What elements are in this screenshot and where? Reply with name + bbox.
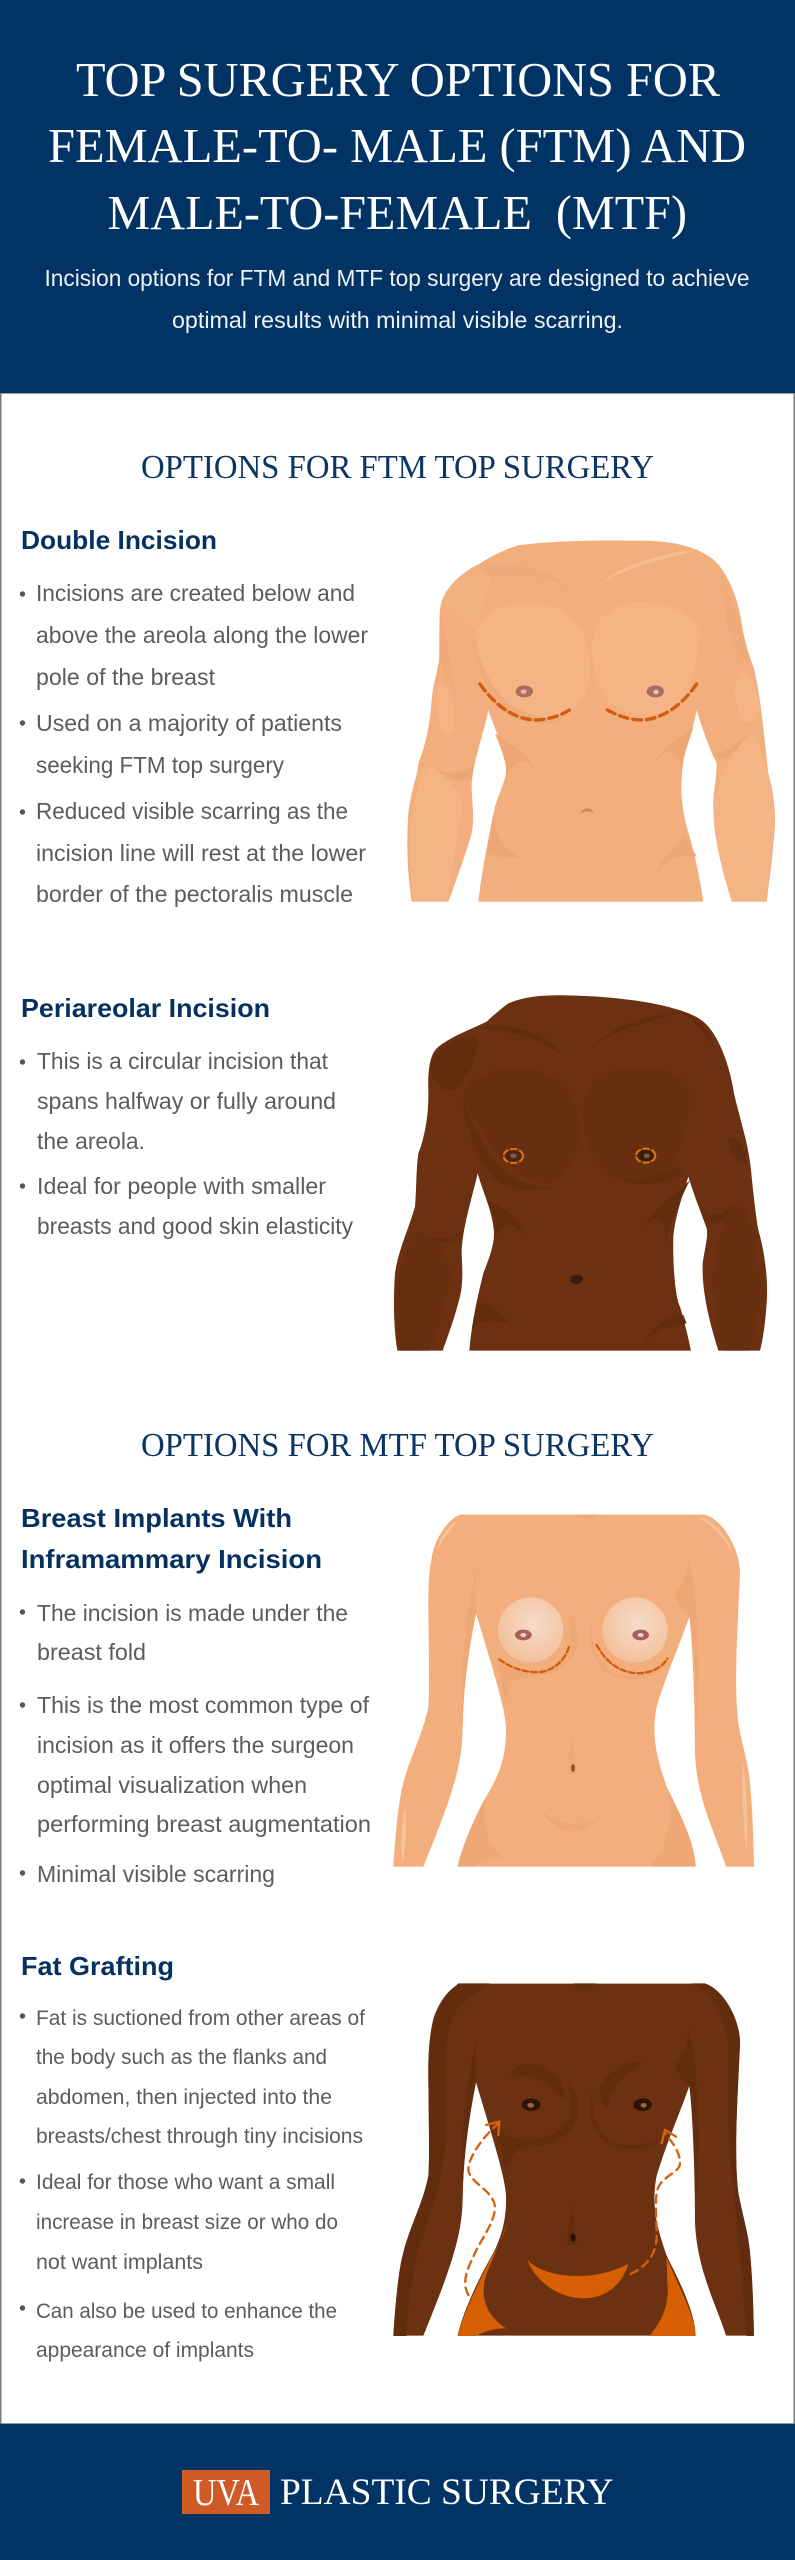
incision lines (499, 1645, 667, 1673)
title: TOP SURGERY OPTIONS FOR (76, 52, 720, 107)
subheading: Double Incision (21, 525, 217, 555)
arrow: right dashed path (631, 2130, 680, 2274)
nipples (522, 2098, 652, 2111)
subheading line 2: Inframammary Incision (21, 1544, 322, 1574)
illustration: fat grafting torso (393, 1983, 754, 2336)
bullet list: The incision is made under the (37, 1600, 348, 1626)
nipples (516, 685, 664, 697)
bullet list: the body such as the flanks and (36, 2045, 327, 2069)
navel (570, 1275, 583, 1284)
bullet list: Fat is suctioned from other areas of (36, 2006, 365, 2030)
bullet list: This is the most common type of (37, 1692, 370, 1718)
bullet list: the areola. (37, 1128, 145, 1154)
bullet list: incision line will rest at the lower (36, 840, 366, 866)
title: MALE-TO-FEMALE (MTF) (108, 185, 687, 240)
implants (498, 1597, 668, 1663)
footer panel (0, 2424, 795, 2560)
block: fat grafting text (20, 1951, 365, 2362)
logo: UVA (193, 2472, 259, 2514)
title: FEMALE-TO- MALE (FTM) AND (48, 118, 746, 173)
bullet list: pole of the breast (36, 664, 216, 690)
body shading (393, 1983, 754, 2336)
title (48, 52, 746, 240)
incision lines (480, 684, 697, 720)
bullet list: breasts and good skin elasticity (37, 1213, 353, 1239)
arrow: left dashed path (465, 2122, 499, 2295)
bullet list: Ideal for people with smaller (37, 1173, 326, 1199)
bullet list: above the areola along the lower (36, 622, 368, 648)
illustration: breast implants torso (393, 1515, 754, 1867)
bullet list: breast fold (37, 1639, 146, 1665)
bullet list: abdomen, then injected into the (36, 2085, 332, 2109)
subtitle: optimal results with minimal visible scarring. (172, 307, 623, 333)
logo: PLASTIC SURGERY (280, 2472, 614, 2513)
bullet list: breasts/chest through tiny incisions (36, 2124, 363, 2148)
navel (571, 1764, 575, 1772)
block: breast implants text (20, 1503, 371, 1887)
bullet list: appearance of implants (36, 2338, 254, 2362)
subheading: Breast Implants With (21, 1503, 292, 1533)
bullet list: border of the pectoralis muscle (36, 881, 353, 907)
navel (581, 808, 594, 813)
illustration: periareolar torso (394, 995, 767, 1351)
bullet list (20, 1600, 371, 1887)
bullet list: This is a circular incision that (37, 1048, 329, 1074)
bullet list (20, 2006, 365, 2362)
bullet list: incision as it offers the surgeon (37, 1732, 354, 1758)
block: double incision text (20, 525, 368, 907)
subheading: Fat Grafting (21, 1951, 174, 1981)
header panel (0, 0, 795, 393)
bullet list: Can also be used to enhance the (36, 2299, 337, 2323)
fat areas (458, 2224, 696, 2336)
subheading: Periareolar Incision (21, 993, 270, 1023)
bullet list (20, 1048, 353, 1239)
block: periareolar text (20, 993, 353, 1239)
bullet list: not want implants (36, 2250, 203, 2274)
muscle shading (397, 1066, 760, 1351)
bullet list: performing breast augmentation (37, 1811, 371, 1837)
bullet list: Reduced visible scarring as the (36, 798, 348, 824)
bullet list: Ideal for those who want a small (36, 2170, 335, 2194)
bullet list: spans halfway or fully around (37, 1088, 336, 1114)
heading: FTM options: OPTIONS FOR FTM TOP SURGERY (141, 449, 654, 486)
navel (571, 2233, 575, 2242)
bullet list: Incisions are created below and (36, 580, 355, 606)
areolas with periareolar incision (504, 1149, 655, 1163)
nipples (515, 1630, 649, 1640)
bullet list: seeking FTM top surgery (36, 752, 284, 778)
bullet list: Used on a majority of patients (36, 710, 342, 736)
subtitle: Incision options for FTM and MTF top surgery are designed to achieve (44, 265, 750, 291)
body panel (1, 393, 794, 2424)
subtitle (44, 265, 750, 333)
heading: MTF options: OPTIONS FOR MTF TOP SURGERY (141, 1427, 654, 1464)
bullet list (20, 580, 368, 907)
bullet list: increase in breast size or who do (36, 2210, 338, 2234)
body shading (458, 1515, 699, 1867)
bullet list: Minimal visible scarring (37, 1861, 275, 1887)
bullet list: optimal visualization when (37, 1772, 307, 1798)
highlights (401, 1517, 747, 1863)
illustration: double incision torso (407, 540, 775, 902)
pectoral shading (410, 548, 774, 902)
